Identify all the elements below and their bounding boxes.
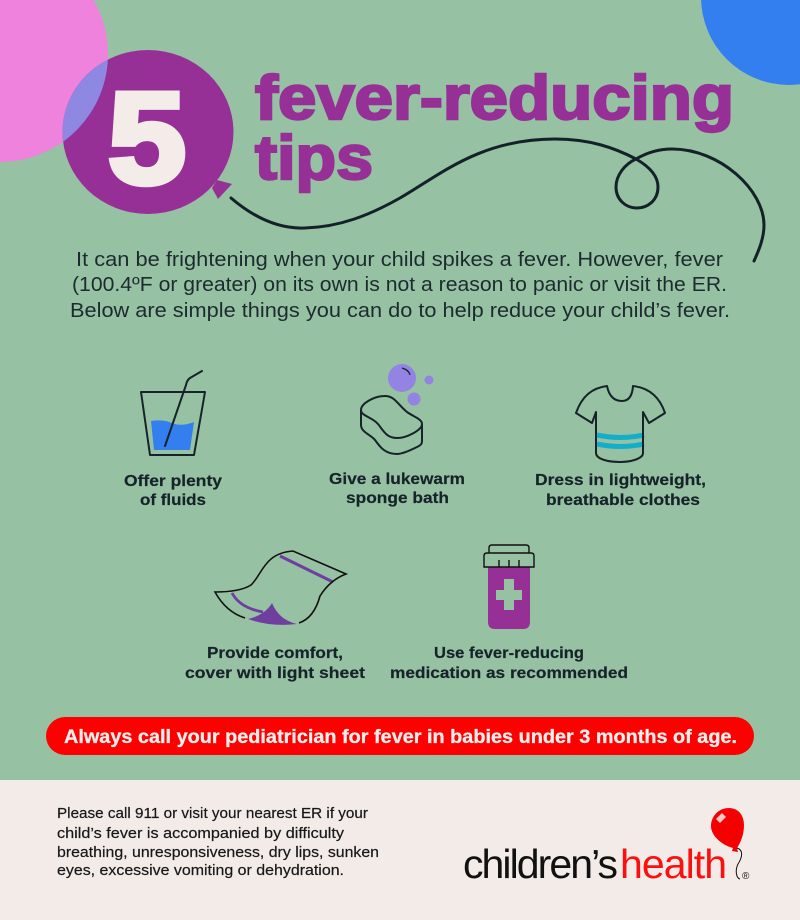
label: Use fever-reducing (434, 645, 584, 662)
icon: sheet (215, 551, 346, 625)
icon: glass of water (141, 371, 205, 455)
callout: Always call your pediatrician for fever in babies under 3 months of age. (64, 727, 737, 748)
label (535, 472, 706, 509)
label (390, 645, 628, 682)
intro paragraph: It can be frightening when your child spikes a fever. However, fever (76, 249, 723, 271)
intro paragraph: Below are simple things you can do to help reduce your child’s fever. (70, 300, 730, 322)
logo: children's health: ® (742, 871, 750, 882)
tip: light sheet (185, 551, 366, 682)
label: breathable clothes (546, 492, 700, 509)
label: Dress in lightweight, (535, 472, 706, 489)
tip: clothes (535, 386, 706, 509)
label (185, 645, 366, 682)
number badge: 5 (108, 65, 186, 211)
emergency note: Please call 911 or visit your nearest ER if your (57, 806, 368, 822)
emergency note: eyes, excessive vomiting or dehydration. (57, 863, 344, 879)
title (255, 64, 734, 193)
label: cover with light sheet (185, 665, 366, 682)
label: of fluids (140, 492, 206, 509)
label: Give a lukewarm (329, 471, 465, 488)
icon: sponge and bubbles (361, 364, 434, 454)
label (124, 473, 222, 509)
icon: medicine bottle (484, 545, 534, 629)
tip: medication (390, 545, 628, 682)
tip: fluids (124, 371, 222, 509)
callout (46, 717, 754, 755)
tip: sponge bath (329, 364, 465, 507)
label: Provide comfort, (207, 645, 343, 662)
blue circle (701, 0, 800, 85)
icon: t-shirt (576, 386, 665, 462)
label: sponge bath (346, 490, 449, 507)
footer panel (0, 780, 800, 920)
pink circle (0, 0, 108, 162)
intro paragraph (70, 249, 730, 322)
logo: children's health: children’s (463, 841, 618, 887)
label: Offer plenty (124, 473, 222, 490)
number badge (62, 50, 234, 214)
title: fever-reducing (255, 64, 734, 133)
swirling balloon string (231, 139, 764, 261)
logo: children's health (463, 808, 750, 887)
title: tips (255, 124, 373, 193)
emergency note: breathing, unresponsiveness, dry lips, sunken (57, 845, 379, 861)
intro paragraph: (100.4ºF or greater) on its own is not a reason to panic or visit the ER. (72, 274, 727, 296)
emergency note: child’s fever is accompanied by difficulty (57, 826, 345, 842)
label: medication as recommended (390, 665, 628, 682)
logo: children's health: health (620, 841, 727, 887)
label (329, 471, 465, 507)
emergency note (57, 806, 379, 879)
